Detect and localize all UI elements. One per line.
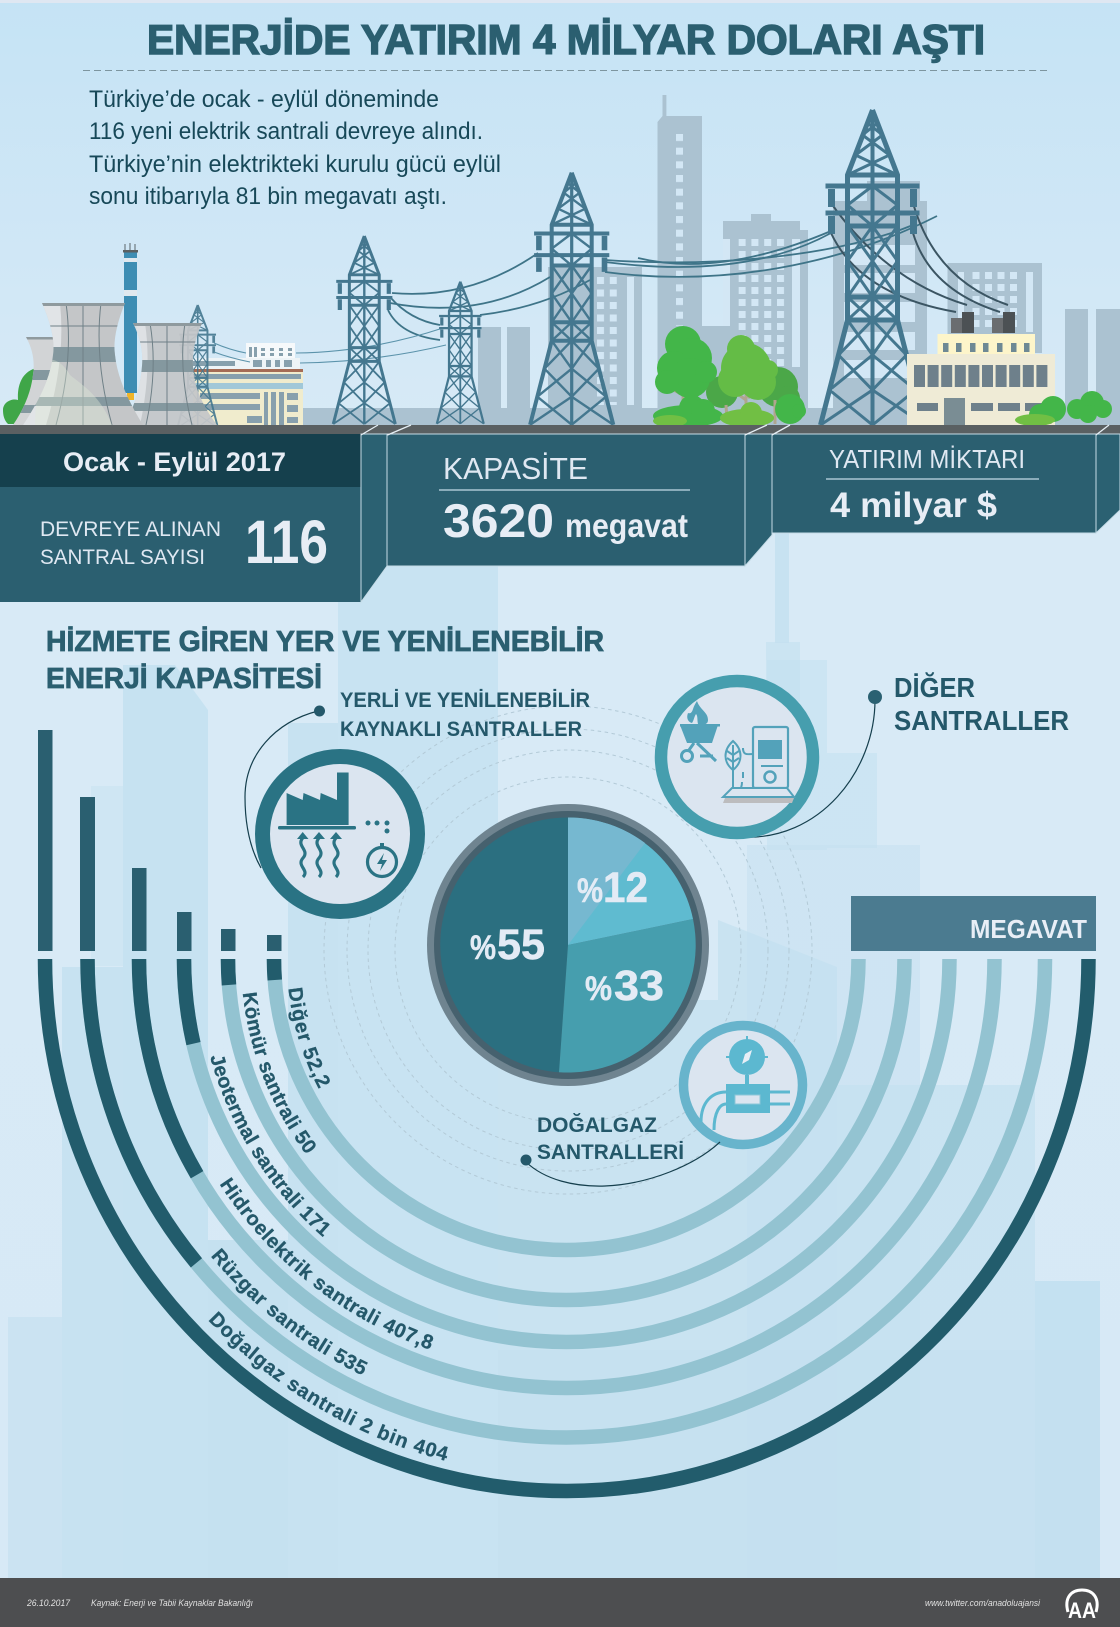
label: hidroelektrik: Hidroelektrik santrali 407,8 (220, 1177, 434, 1349)
panel label (40, 518, 221, 569)
vertical bars (38, 730, 282, 951)
footer source: Kaynak: Enerji ve Tabii Kaynaklar Bakanlığı (91, 1598, 253, 1609)
pump (723, 727, 794, 803)
section heading (46, 626, 604, 695)
value 12: % (577, 872, 603, 910)
panel: yatırım miktarı (772, 434, 1096, 533)
dashed rings (324, 706, 812, 1194)
intro paragraph: sonu itibarıyla 81 bin megavatı aştı. (89, 183, 447, 210)
icon: gas meter circle (684, 1026, 802, 1144)
city buildings skyline (303, 95, 1120, 426)
leaf (726, 741, 753, 792)
megavat header (851, 896, 1096, 951)
arc: jeotermal (184, 959, 950, 1342)
label: jeotermal: Jeotermal santrali 171 (210, 1056, 330, 1237)
left tree behind power plant (3, 368, 50, 424)
panel value: 4 milyar $ (830, 486, 997, 525)
semicircle chart arcs (45, 959, 1088, 1491)
arc labels (208, 988, 448, 1461)
panel: side face 3 (1096, 434, 1120, 533)
flame (687, 701, 708, 725)
label: diğer: Diğer 52,2 (288, 988, 330, 1089)
label: doğalgaz santralleri (537, 1112, 684, 1164)
logo: AA (1067, 1590, 1097, 1623)
title divider (83, 70, 1049, 72)
arc: kömür (228, 959, 904, 1300)
trees centre (653, 326, 806, 427)
footer bar (0, 1578, 1120, 1627)
faint background skyline (8, 533, 1100, 1578)
intro paragraph: Türkiye’nin elektrikteki kurulu gücü eylül (89, 151, 501, 178)
meter box (701, 1084, 790, 1130)
panel date: Ocak - Eylül 2017 (63, 447, 286, 477)
leader line: doğalgaz (520, 1142, 720, 1186)
stopwatch (368, 843, 396, 876)
top edge strip (0, 0, 1120, 3)
ground strip (0, 425, 1120, 434)
panel: side face 2 (745, 434, 772, 566)
icon: biomass pump circle (661, 681, 813, 833)
logo: AA: AA (1068, 1598, 1096, 1623)
intro paragraph: 116 yeni elektrik santrali devreye alındı. (89, 118, 483, 145)
factory (278, 772, 390, 834)
pylons (333, 110, 924, 425)
label: diğer santraller: SANTRALLER (894, 705, 1069, 736)
value 12: 12 (603, 864, 648, 912)
panel value: 3620 (443, 494, 554, 547)
megavat header: MEGAVAT (970, 914, 1087, 944)
right bushes (1015, 391, 1112, 426)
label: yerli ve yenilenebilir: KAYNAKLI SANTRALLER (340, 717, 582, 741)
slice 55 (440, 817, 568, 1072)
label: doğalgaz: Doğalgaz santrali 2 bin 404 (208, 1311, 448, 1461)
footer url: www.twitter.com/anadoluajansi (925, 1598, 1041, 1609)
arc: rüzgar (88, 959, 1045, 1438)
panel: side face 1 (361, 434, 387, 602)
cooling tower: back left (13, 337, 54, 425)
label: rüzgar: Rüzgar santrali 535 (211, 1248, 368, 1374)
panel value: 116 (245, 508, 328, 576)
heat arrows (301, 838, 338, 877)
icon: factory geothermal circle (262, 756, 418, 912)
power plant (10, 243, 303, 428)
panel unit: megavat (565, 507, 688, 544)
pie chart (427, 804, 709, 1086)
value 55: 55 (497, 921, 545, 969)
intro paragraph (89, 86, 501, 210)
panel label: KAPASİTE (443, 451, 588, 486)
grill (680, 724, 720, 762)
gauge (726, 1036, 768, 1084)
chimney (123, 243, 138, 400)
section heading: ENERJİ KAPASİTESİ (46, 663, 322, 695)
leader line: diğer (740, 690, 882, 837)
panel label: YATIRIM MİKTARI (829, 444, 1025, 474)
slice 12 (568, 817, 693, 945)
label: kömür: Kömür santrali 50 (242, 992, 316, 1153)
section heading: HİZMETE GİREN YER VE YENİLENEBİLİR (46, 626, 604, 658)
power lines (214, 203, 1008, 363)
label: yerli ve yenilenebilir: YERLİ VE YENİLENEBİLİR (340, 688, 590, 712)
intro paragraph: Türkiye’de ocak - eylül döneminde (89, 86, 439, 113)
cooling tower: right (132, 323, 217, 425)
title: ENERJİDE YATIRIM 4 MİLYAR DOLARI AŞTI (147, 16, 985, 63)
slanted panel edges (361, 425, 1109, 435)
label: diğer santraller: DİĞER (894, 672, 975, 703)
substation building (907, 312, 1055, 425)
arc: hidroelektrik (139, 959, 994, 1388)
factory building (193, 343, 303, 425)
footer date: 26.10.2017 (26, 1598, 71, 1609)
value 33 (585, 962, 664, 1010)
value 33: % (585, 970, 612, 1008)
value 55 (470, 921, 545, 969)
value 12 (577, 864, 648, 912)
value 33: 33 (614, 962, 664, 1010)
slice 33 (559, 919, 696, 1073)
panel label: SANTRAL SAYISI (40, 546, 205, 569)
leader line: yerli (245, 706, 325, 868)
panel: kapasite (387, 434, 745, 566)
arc: diğer (274, 959, 858, 1250)
panel header (0, 434, 361, 487)
value 55: % (470, 929, 496, 967)
label: doğalgaz santralleri: DOĞALGAZ (537, 1112, 657, 1137)
arc: doğalgaz (45, 959, 1088, 1491)
label: diğer santraller (894, 672, 1069, 736)
small background pylon (177, 305, 218, 428)
label: yerli ve yenilenebilir (340, 688, 590, 741)
panel label: DEVREYE ALINAN (40, 518, 221, 541)
cooling tower: front (20, 303, 145, 427)
label: doğalgaz santralleri: SANTRALLERİ (537, 1140, 684, 1164)
panel: ocak-eylül (0, 434, 361, 602)
